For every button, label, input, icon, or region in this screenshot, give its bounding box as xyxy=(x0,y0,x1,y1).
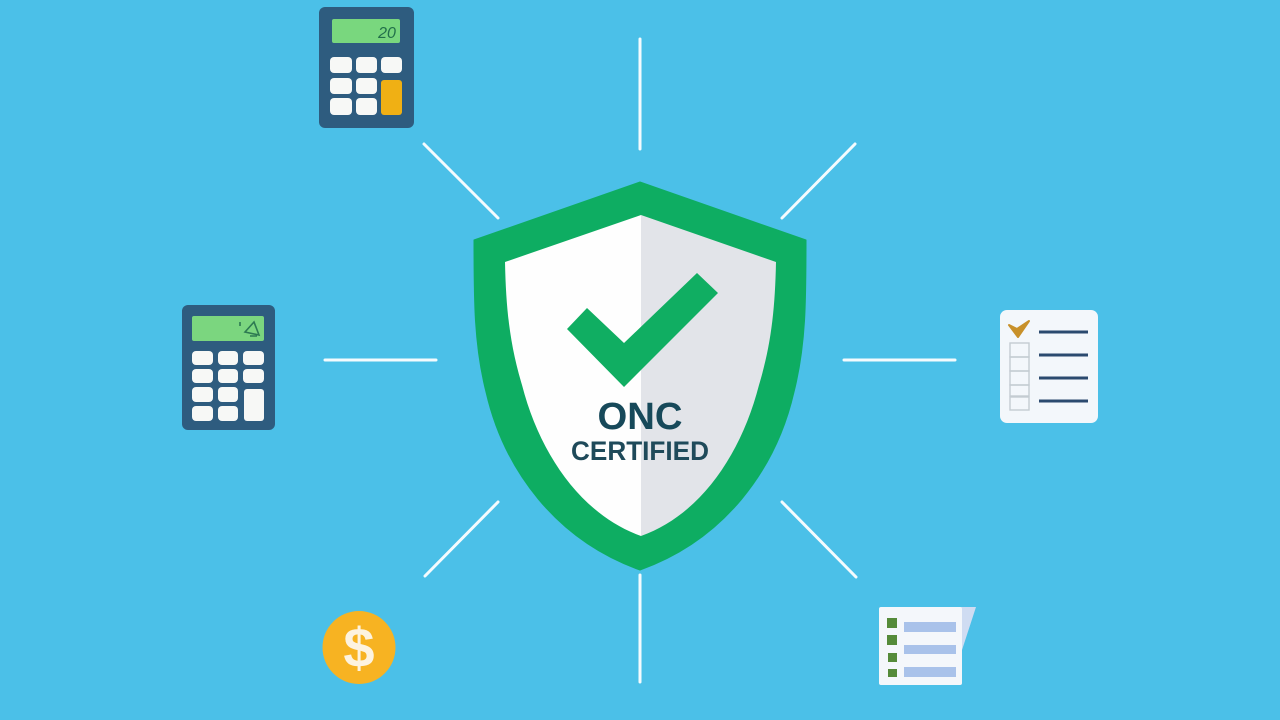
shield inner left half xyxy=(505,215,641,536)
shield inner right half xyxy=(641,215,776,536)
shield outer green border xyxy=(474,182,806,570)
icon: calculator top xyxy=(319,7,414,128)
radiating rays xyxy=(325,39,955,682)
check mark xyxy=(567,273,718,387)
ONC label: ONC xyxy=(598,396,682,438)
icon: dollar coin: $ xyxy=(343,616,375,679)
icon: checklist right xyxy=(1000,310,1098,423)
icon: dollar coin xyxy=(322,611,396,684)
shield badge xyxy=(474,182,806,570)
icon: calculator top: 20 xyxy=(377,25,396,42)
icon: calculator left xyxy=(182,305,275,430)
CERTIFIED label: CERTIFIED xyxy=(571,436,709,466)
icon: document list bottom right xyxy=(879,607,976,685)
